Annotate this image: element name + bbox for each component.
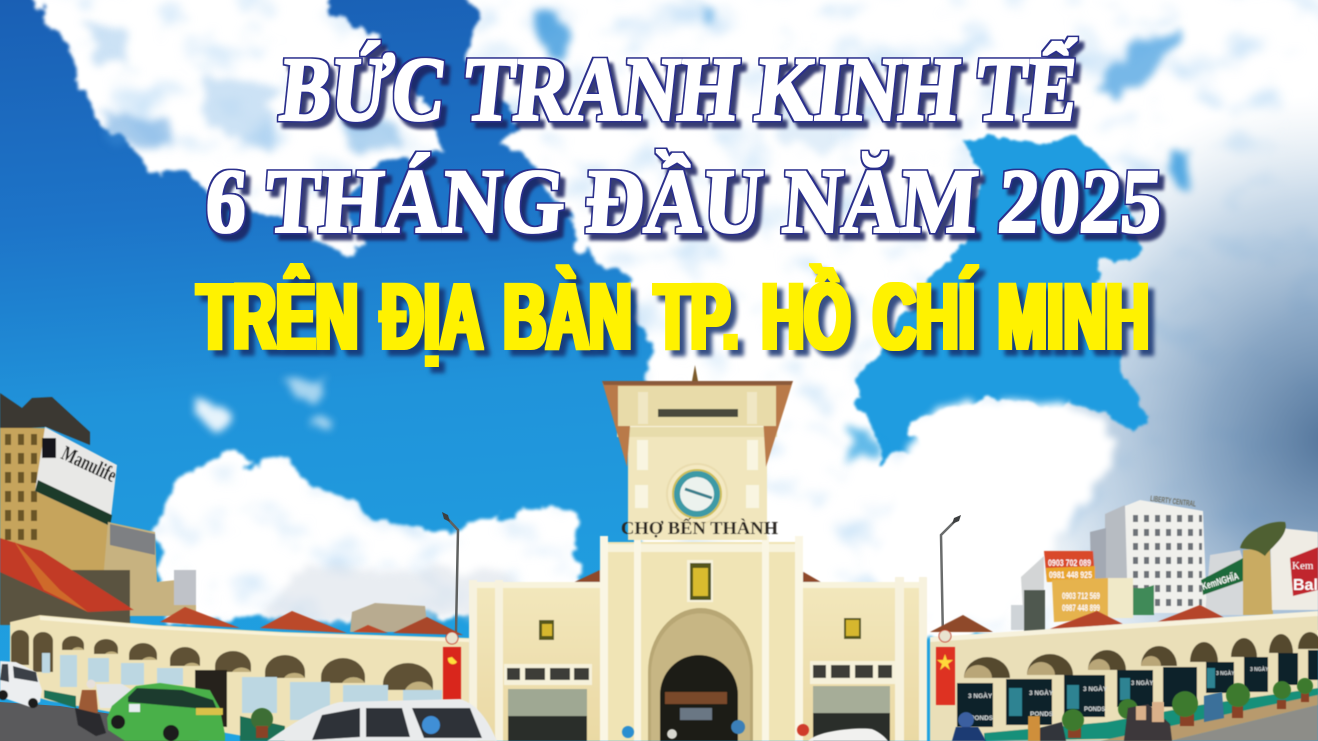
lower-right cumulus edge bbox=[860, 401, 1112, 620]
market building bbox=[469, 365, 927, 741]
lamp post right bbox=[941, 515, 961, 640]
distant buildings behind left arcade bbox=[350, 603, 428, 632]
arches bbox=[964, 632, 1318, 678]
flag: Vietnam flag right bbox=[936, 630, 955, 705]
title line 1: BỨC TRANH KINH TẾ bbox=[276, 37, 1083, 140]
sign: Kem Ballet: Kem bbox=[1292, 560, 1314, 572]
poster text: PONDS bbox=[970, 715, 994, 722]
road left bbox=[0, 702, 200, 741]
emblem bbox=[844, 618, 861, 639]
billboard: Manulife bbox=[35, 427, 121, 526]
wall bbox=[10, 615, 470, 741]
lamp post left bbox=[442, 512, 458, 632]
sign: Kem Ballet bbox=[1290, 547, 1318, 596]
shutter bbox=[813, 686, 890, 713]
teal base bbox=[984, 688, 1318, 741]
poster text: 3 NGÀY bbox=[1131, 680, 1153, 687]
white car behind taxi bbox=[96, 684, 138, 708]
roofs bbox=[160, 607, 463, 635]
left buildings bbox=[0, 393, 196, 625]
billboard: red phone numbers bbox=[1044, 551, 1095, 582]
storm shading on right cloud bbox=[960, 60, 1318, 630]
clock bbox=[667, 464, 727, 524]
billboard: red phone numbers: 0981 448 925 bbox=[1049, 570, 1093, 581]
poster text: 3 NGÀY bbox=[1083, 684, 1108, 693]
roof bbox=[602, 381, 793, 467]
pedestrians at the market entrance bbox=[622, 720, 888, 741]
brackets bbox=[635, 440, 759, 508]
building: tan hotel bbox=[0, 428, 110, 580]
arches bbox=[11, 630, 433, 690]
roofs bbox=[930, 605, 1225, 632]
plants right bbox=[1062, 678, 1313, 738]
poster text bbox=[968, 666, 1269, 722]
central emblem bbox=[687, 560, 713, 602]
left pavement plant bbox=[251, 708, 273, 738]
billboard: orange phone numbers: 0903 712 569 bbox=[1062, 591, 1100, 601]
hotel tower: LIBERTY CENTRAL bbox=[1150, 494, 1197, 509]
motorbikes right bbox=[952, 692, 1224, 741]
right side buildings bbox=[1205, 550, 1243, 615]
road bbox=[1170, 705, 1318, 741]
hotel tower bbox=[1090, 494, 1207, 615]
left wing bbox=[469, 580, 602, 741]
upper room bbox=[618, 386, 776, 426]
emblem bbox=[539, 620, 554, 640]
building: middle block bbox=[100, 522, 196, 616]
poster text: 3 NGÀY bbox=[968, 691, 993, 700]
vents bbox=[810, 661, 895, 684]
central block bbox=[600, 536, 803, 741]
poster text: 3 NGÀY bbox=[1216, 670, 1235, 677]
billboard: red phone numbers: 0903 702 089 bbox=[1048, 558, 1091, 569]
title line 2: 6 THÁNG ĐẦU NĂM 2025 bbox=[202, 149, 1166, 252]
right wing bbox=[800, 577, 927, 741]
tower ledge bbox=[617, 424, 777, 437]
shutter bbox=[508, 689, 587, 716]
sign: Chợ Bến Thành: CHỢ BẾN THÀNH bbox=[621, 517, 778, 538]
shop house under red roof bbox=[0, 570, 130, 625]
right arcade bbox=[930, 605, 1318, 741]
billboard: orange phone numbers: 0987 448 899 bbox=[1062, 603, 1100, 613]
roof behind wings bbox=[568, 570, 826, 585]
small clouds and sky patches bbox=[84, 3, 1188, 620]
vents bbox=[504, 664, 592, 685]
finial bbox=[692, 365, 698, 381]
building behind billboards bbox=[1021, 556, 1044, 630]
wall bbox=[930, 613, 1318, 741]
white van foreground bbox=[267, 699, 497, 741]
white car left bbox=[0, 661, 42, 708]
market side door bbox=[195, 670, 227, 727]
poster text: PONDS bbox=[1030, 711, 1054, 718]
billboard: orange phone numbers bbox=[1052, 578, 1133, 622]
flag: Party flag left bbox=[443, 632, 461, 700]
poster text: 3 NGÀY bbox=[1250, 666, 1269, 673]
teal base bbox=[44, 690, 76, 708]
billboard: Manulife: Manulife bbox=[58, 441, 121, 487]
main arch bbox=[648, 608, 753, 741]
poster text: PONDS bbox=[1084, 707, 1105, 713]
building: rooftop bbox=[0, 393, 90, 445]
posters bbox=[42, 653, 442, 720]
poster text: 3 NGÀY bbox=[1029, 688, 1054, 697]
sign: Kem Nghĩa: KemNGHĨA bbox=[1200, 569, 1240, 593]
blue sky gap right of the tower bbox=[856, 140, 1146, 460]
dark posters bbox=[957, 650, 1318, 727]
green taxi bbox=[107, 683, 225, 741]
left arcade bbox=[10, 607, 470, 741]
red roof bbox=[0, 538, 134, 612]
sign: Kem Nghĩa bbox=[1200, 558, 1243, 595]
clock tower bbox=[602, 365, 793, 540]
motorbike rider left bbox=[75, 680, 106, 736]
title bbox=[197, 37, 1166, 370]
right buildings bbox=[1011, 494, 1318, 632]
